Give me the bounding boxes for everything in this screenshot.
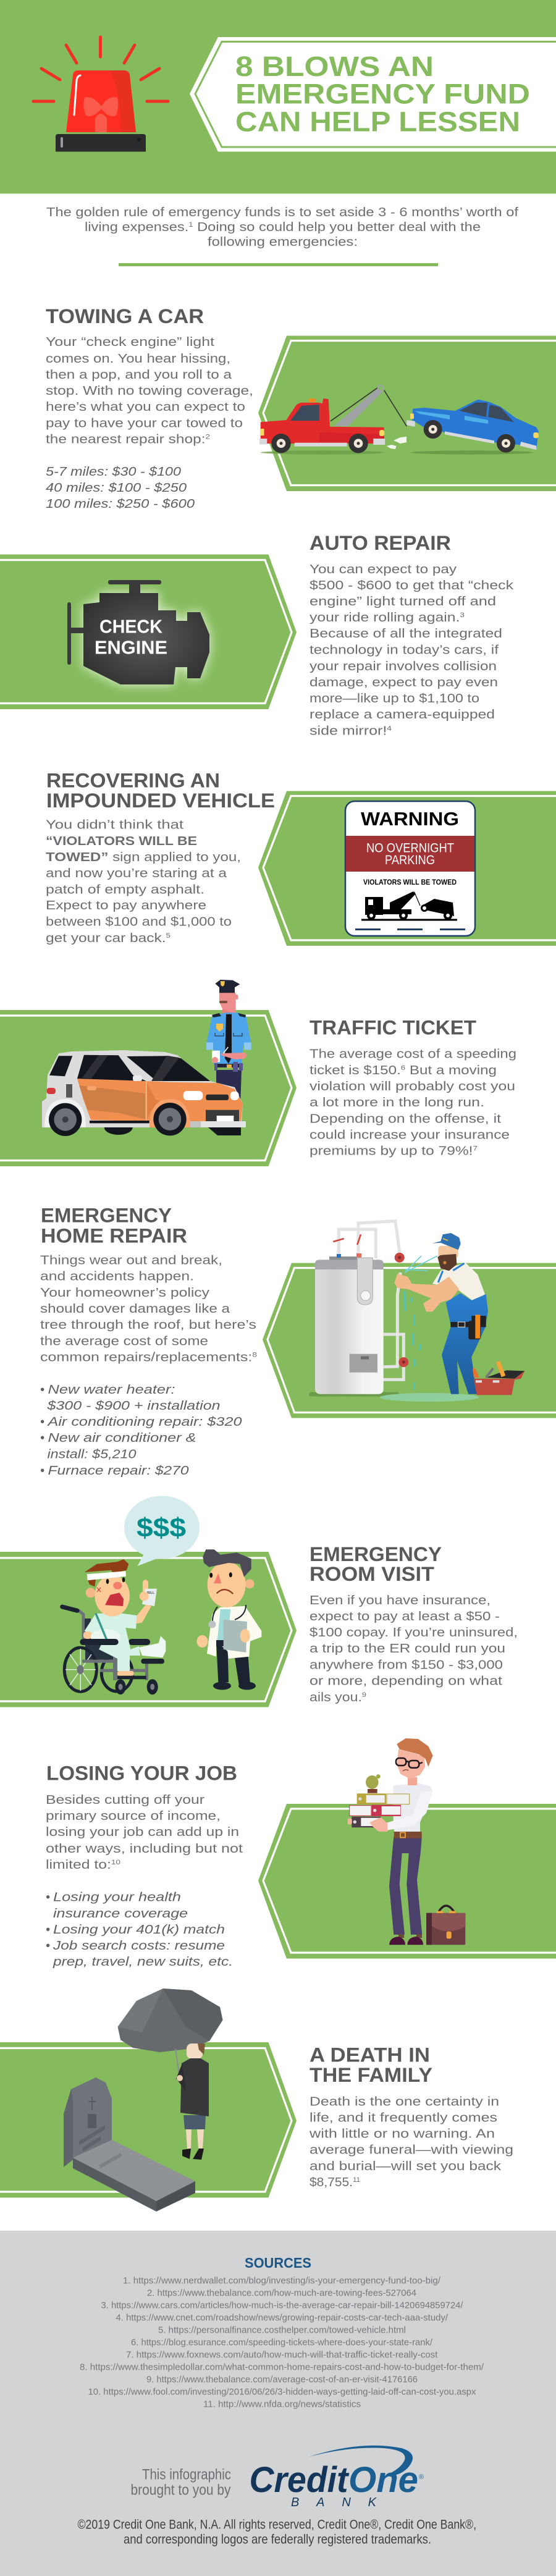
list: repair costs: • xyxy=(40,1415,44,1429)
list: repair costs: Furnace repair: $270 xyxy=(48,1464,189,1478)
list: job costs: Losing your health xyxy=(53,1890,181,1904)
panel: home repair xyxy=(263,1263,556,1418)
callout: speech bubble xyxy=(124,1496,200,1566)
sign: no overnight parking xyxy=(345,801,475,936)
text: towing body: 100 miles: $250 - $600 xyxy=(46,497,195,511)
intro text xyxy=(46,206,519,249)
heading: auto repair: AUTO REPAIR xyxy=(310,532,451,554)
list: repair costs: • xyxy=(40,1383,44,1397)
illustration: plumber xyxy=(394,1233,524,1395)
heading: sources: SOURCES xyxy=(245,2255,311,2271)
list: job costs: prep, travel, new suits, etc. xyxy=(53,1955,233,1969)
text: losing job body: other ways, including but not xyxy=(46,1842,243,1856)
illustration: woman with umbrella xyxy=(118,1989,222,2160)
header band xyxy=(0,0,556,194)
text: towing body: 5-7 miles: $30 - $100 xyxy=(46,465,181,479)
text: home repair body: 8 xyxy=(252,1352,257,1359)
illustration: man carrying binders xyxy=(348,1738,465,1945)
text: death in family body: with little or no warning. An xyxy=(309,2128,495,2141)
logo: Credit One Bank: ® xyxy=(419,2473,424,2481)
footer xyxy=(0,2231,556,2576)
illustration: patient in wheelchair xyxy=(62,1559,166,1694)
list: job costs: Losing your 401(k) match xyxy=(53,1923,225,1937)
text: impounded body: TOWED” sign applied to you, xyxy=(46,851,241,864)
text: home repair body: should cover damages like a xyxy=(40,1302,230,1316)
illustration: patient in wheelchair: BILL xyxy=(147,1591,155,1595)
text: towing body: Your “check engine” light xyxy=(46,335,215,349)
text: auto repair body: side mirror! xyxy=(310,724,371,738)
title: 8 BLOWS AN xyxy=(235,51,434,82)
panel: traffic ticket xyxy=(0,1010,297,1166)
heading: home repair: HOME REPAIR xyxy=(41,1224,187,1247)
intro text: Doing so could help you better deal with the xyxy=(193,221,481,234)
title: EMERGENCY FUND xyxy=(235,78,530,110)
list: sources: 7. https://www.foxnews.com/auto/how-much-will-that-traffic-ticket-really-cost xyxy=(126,2350,438,2360)
list: sources: 1. https://www.nerdwallet.com/blog/investing/is-your-emergency-fund-too-big/ xyxy=(123,2276,441,2286)
logo: Credit One Bank: One xyxy=(348,2460,418,2500)
text: death in family body xyxy=(309,2095,513,2189)
list: repair costs: New water heater: xyxy=(48,1383,175,1397)
list: sources: 9. https://www.thebalance.com/average-cost-of-an-er-visit-4176166 xyxy=(146,2375,418,2384)
list: job costs: insurance coverage xyxy=(53,1907,188,1921)
text: auto repair body: engine” light turned off and xyxy=(310,595,496,608)
panel: towing xyxy=(258,336,556,491)
text: towing body: 40 miles: $100 - $250 xyxy=(46,481,187,495)
heading: emergency room: EMERGENCY xyxy=(310,1543,442,1565)
text: emergency room body: expect to pay at least a $50 - xyxy=(310,1610,500,1623)
sign: no overnight parking: PARKING xyxy=(385,853,435,867)
icon: check engine: ENGINE xyxy=(95,636,167,659)
heading: home repair: EMERGENCY xyxy=(41,1205,172,1227)
heading: towing: TOWING A CAR xyxy=(46,305,204,327)
text: traffic ticket body: violation will probably cost you xyxy=(310,1080,515,1093)
list: sources: 8. https://www.thesimpledollar.com/what-common-home-repairs-cost-and-how-to-budget-for-them/ xyxy=(80,2362,484,2372)
text: impounded body: get your car back. xyxy=(46,932,144,945)
section: towing a car xyxy=(46,305,556,511)
panel: auto repair xyxy=(0,555,297,709)
text: copyright: ©2019 Credit One Bank, N.A. All rights reserved, Credit One®, Credit One Bank®, xyxy=(78,2518,476,2532)
text: emergency room body: 9 xyxy=(362,1691,366,1699)
illustration: tow truck pulling car xyxy=(259,385,539,455)
illustration: water heater xyxy=(309,1221,479,1402)
text: traffic ticket body: could increase your insurance xyxy=(310,1128,510,1142)
list: sources: 6. https://blog.esurance.com/speeding-tickets-where-does-your-state-rank/ xyxy=(131,2338,433,2347)
list: repair costs xyxy=(40,1383,242,1478)
heading: death in family xyxy=(310,2044,432,2086)
text: towing body: comes on. You hear hissing, xyxy=(46,352,230,366)
panel: losing job xyxy=(258,1804,556,1958)
panel: emergency room xyxy=(0,1552,297,1707)
callout: speech bubble: $$$ xyxy=(137,1513,186,1543)
section: death in the family xyxy=(0,1989,513,2212)
section: losing your job xyxy=(46,1738,556,1969)
text: auto repair body: 4 xyxy=(387,725,392,733)
list: repair costs: $300 - $900 + installation xyxy=(46,1399,220,1413)
text: death in family body: $8,755. xyxy=(310,2176,351,2189)
heading: death in family: THE FAMILY xyxy=(310,2064,432,2086)
text: towing body: the nearest repair shop: xyxy=(46,432,176,446)
text: losing job body: losing your job can add up in xyxy=(46,1825,239,1839)
text: towing body xyxy=(46,335,253,511)
list: sources xyxy=(80,2276,484,2409)
intro text: 1 xyxy=(188,221,193,229)
text: losing job body: limited to: xyxy=(46,1858,99,1872)
icon: check engine: CHECK xyxy=(99,615,163,638)
section: auto repair xyxy=(0,532,514,738)
text: impounded body: “VIOLATORS WILL BE xyxy=(46,835,197,848)
heading: emergency room xyxy=(310,1543,442,1585)
section: emergency home repair xyxy=(40,1205,556,1478)
text: traffic ticket body xyxy=(310,1048,516,1158)
text: death in family body: average funeral—with viewing xyxy=(310,2144,513,2157)
text: towing body: 2 xyxy=(206,434,210,441)
intro text: The golden rule of emergency funds is to set aside 3 - 6 months’ worth of xyxy=(46,206,519,219)
list: repair costs: • xyxy=(40,1431,44,1445)
text: emergency room body: or more, depending on what xyxy=(310,1674,503,1688)
list: repair costs: New air conditioner & xyxy=(48,1431,196,1445)
list: job costs: • xyxy=(46,1890,50,1904)
text: home repair body xyxy=(40,1254,257,1364)
text: traffic ticket body: 6 xyxy=(401,1064,405,1072)
text: emergency room body: Even if you have insurance, xyxy=(310,1594,491,1607)
title banner xyxy=(190,37,556,152)
text: emergency room body xyxy=(310,1594,518,1704)
logo: Credit One Bank xyxy=(250,2446,424,2509)
list: sources: 11. http://www.nfda.org/news/statistics xyxy=(203,2399,361,2409)
text: auto repair body xyxy=(310,563,514,738)
text: copyright xyxy=(78,2518,476,2546)
text: traffic ticket body: a lot more in the long run. xyxy=(310,1096,484,1109)
text: traffic ticket body: 7 xyxy=(473,1145,478,1153)
text: home repair body: tree through the roof, but here’s xyxy=(40,1318,256,1332)
text: brought to you by xyxy=(131,2466,231,2498)
sign: no overnight parking: NO OVERNIGHT xyxy=(366,841,454,855)
list: repair costs: • xyxy=(40,1464,44,1478)
text: losing job body: Besides cutting off your xyxy=(46,1793,204,1807)
text: emergency room body: ails you. xyxy=(310,1691,355,1704)
text: auto repair body: technology in today’s cars, if xyxy=(310,644,499,657)
text: traffic ticket body: But a moving xyxy=(405,1064,497,1077)
text: death in family body: life, and it frequently comes xyxy=(310,2111,497,2125)
text: emergency room body: anywhere from $150 - $3,000 xyxy=(310,1658,503,1672)
text: losing job body: primary source of income, xyxy=(46,1809,221,1823)
text: auto repair body: replace a camera-equipped xyxy=(310,708,495,722)
list: job costs: • xyxy=(46,1923,50,1937)
text: impounded body: between $100 and $1,000 to xyxy=(46,915,232,929)
text: impounded body: 5 xyxy=(166,932,171,940)
heading: impounded vehicle: RECOVERING AN xyxy=(46,770,220,792)
illustration: doctor xyxy=(196,1549,261,1690)
icon: check engine xyxy=(67,580,209,684)
heading: impounded vehicle: IMPOUNDED VEHICLE xyxy=(46,789,275,812)
text: death in family body: and burial—will set you back xyxy=(310,2160,502,2173)
list: sources: 10. https://www.fool.com/investing/2016/06/26/3-hidden-ways-getting-laid-off-can-cost-you.aspx xyxy=(88,2387,476,2397)
text: brought to you by: brought to you by xyxy=(131,2482,231,2498)
sign: no overnight parking: VIOLATORS WILL BE TOWED xyxy=(363,878,457,886)
text: auto repair body: You can expect to pay xyxy=(310,563,457,576)
heading: death in family: A DEATH IN xyxy=(310,2044,430,2066)
text: traffic ticket body: The average cost of a speeding xyxy=(310,1048,516,1061)
text: impounded body: Expect to pay anywhere xyxy=(46,899,206,912)
logo: Credit One Bank: BANK xyxy=(291,2496,377,2509)
text: towing body: stop. With no towing coverage, xyxy=(46,384,253,398)
text: traffic ticket body: premiums by up to 79%! xyxy=(310,1144,443,1158)
intro text: living expenses. xyxy=(85,221,172,234)
text: impounded body: and now you’re staring at a xyxy=(46,867,227,880)
sign: no overnight parking: WARNING xyxy=(361,808,459,830)
text: death in family body: 11 xyxy=(353,2176,360,2184)
icon: red siren xyxy=(33,37,168,152)
text: auto repair body: your repair involves collision xyxy=(310,660,497,673)
text: home repair body: common repairs/replacements: xyxy=(40,1350,210,1364)
heading: traffic ticket: TRAFFIC TICKET xyxy=(310,1017,476,1039)
text: impounded body xyxy=(46,818,241,945)
text: auto repair body: Because of all the integrated xyxy=(310,627,502,641)
list: job costs xyxy=(46,1890,233,1969)
title xyxy=(235,51,530,137)
heading: emergency room: ROOM VISIT xyxy=(310,1563,434,1585)
illustration: gravestone xyxy=(64,2077,195,2212)
section: emergency room visit xyxy=(0,1496,518,1707)
text: death in family body: Death is the one certainty in xyxy=(310,2095,499,2109)
illustration: police officer xyxy=(206,980,251,1135)
text: home repair body: Your homeowner’s policy xyxy=(40,1286,209,1300)
logo: Credit One Bank: Credit xyxy=(250,2460,350,2500)
text: losing job body: 10 xyxy=(111,1859,120,1866)
text: traffic ticket body: Depending on the offense, it xyxy=(310,1112,502,1126)
text: auto repair body: damage, expect to pay even xyxy=(310,676,498,689)
text: emergency room body: a trip to the ER could run you xyxy=(310,1642,505,1656)
intro text: following emergencies: xyxy=(208,235,358,249)
heading: home repair xyxy=(41,1205,187,1247)
text: auto repair body: $500 - $600 to get that “check xyxy=(310,579,514,592)
panel: death in family xyxy=(0,2042,297,2198)
list: repair costs: Air conditioning repair: $320 xyxy=(47,1415,242,1429)
heading: losing your job: LOSING YOUR JOB xyxy=(46,1762,237,1784)
text: brought to you by: This infographic xyxy=(142,2466,231,2483)
text: home repair body: and accidents happen. xyxy=(40,1270,194,1284)
text: towing body: pay to have your car towed to xyxy=(46,416,243,430)
list: sources: 5. https://personalfinance.costhelper.com/towed-vehicle.html xyxy=(158,2325,406,2335)
text: traffic ticket body: ticket is $150. xyxy=(310,1064,385,1077)
text: copyright: and corresponding logos are federally registered trademarks. xyxy=(124,2533,431,2546)
text: auto repair body: your ride rolling again. xyxy=(310,611,431,625)
section: traffic ticket xyxy=(0,980,516,1166)
list: sources: 3. https://www.cars.com/articles/how-much-is-the-average-car-repair-bill-1420694859724/ xyxy=(101,2300,463,2310)
text: towing body: here’s what you can expect to xyxy=(46,400,245,414)
list: sources: 2. https://www.thebalance.com/how-much-are-towing-fees-527064 xyxy=(147,2288,416,2298)
text: impounded body: patch of empty asphalt. xyxy=(46,883,204,897)
text: emergency room body: $100 copay. If you’re uninsured, xyxy=(310,1626,518,1639)
text: impounded body: You didn’t think that xyxy=(46,818,184,831)
text: towing body: then a pop, and you roll to a xyxy=(46,368,232,382)
list: job costs: Job search costs: resume xyxy=(53,1939,225,1953)
text: home repair body: the average cost of some xyxy=(40,1334,208,1348)
text: auto repair body: more—like up to $1,100 to xyxy=(310,692,479,705)
list: job costs: • xyxy=(46,1939,50,1953)
text: home repair body: Things wear out and break, xyxy=(40,1254,222,1268)
illustration: orange car xyxy=(42,1050,246,1136)
text: losing job body xyxy=(46,1793,243,1872)
text: auto repair body: 3 xyxy=(460,612,465,619)
heading: impounded vehicle xyxy=(46,770,275,812)
section: impounded vehicle xyxy=(46,770,556,946)
title: CAN HELP LESSEN xyxy=(235,106,520,137)
panel: impounded xyxy=(258,791,556,946)
list: repair costs: install: $5,210 xyxy=(47,1448,136,1462)
list: sources: 4. https://www.cnet.com/roadshow/news/growing-repair-costs-car-tech-aaa-study/ xyxy=(116,2313,449,2323)
